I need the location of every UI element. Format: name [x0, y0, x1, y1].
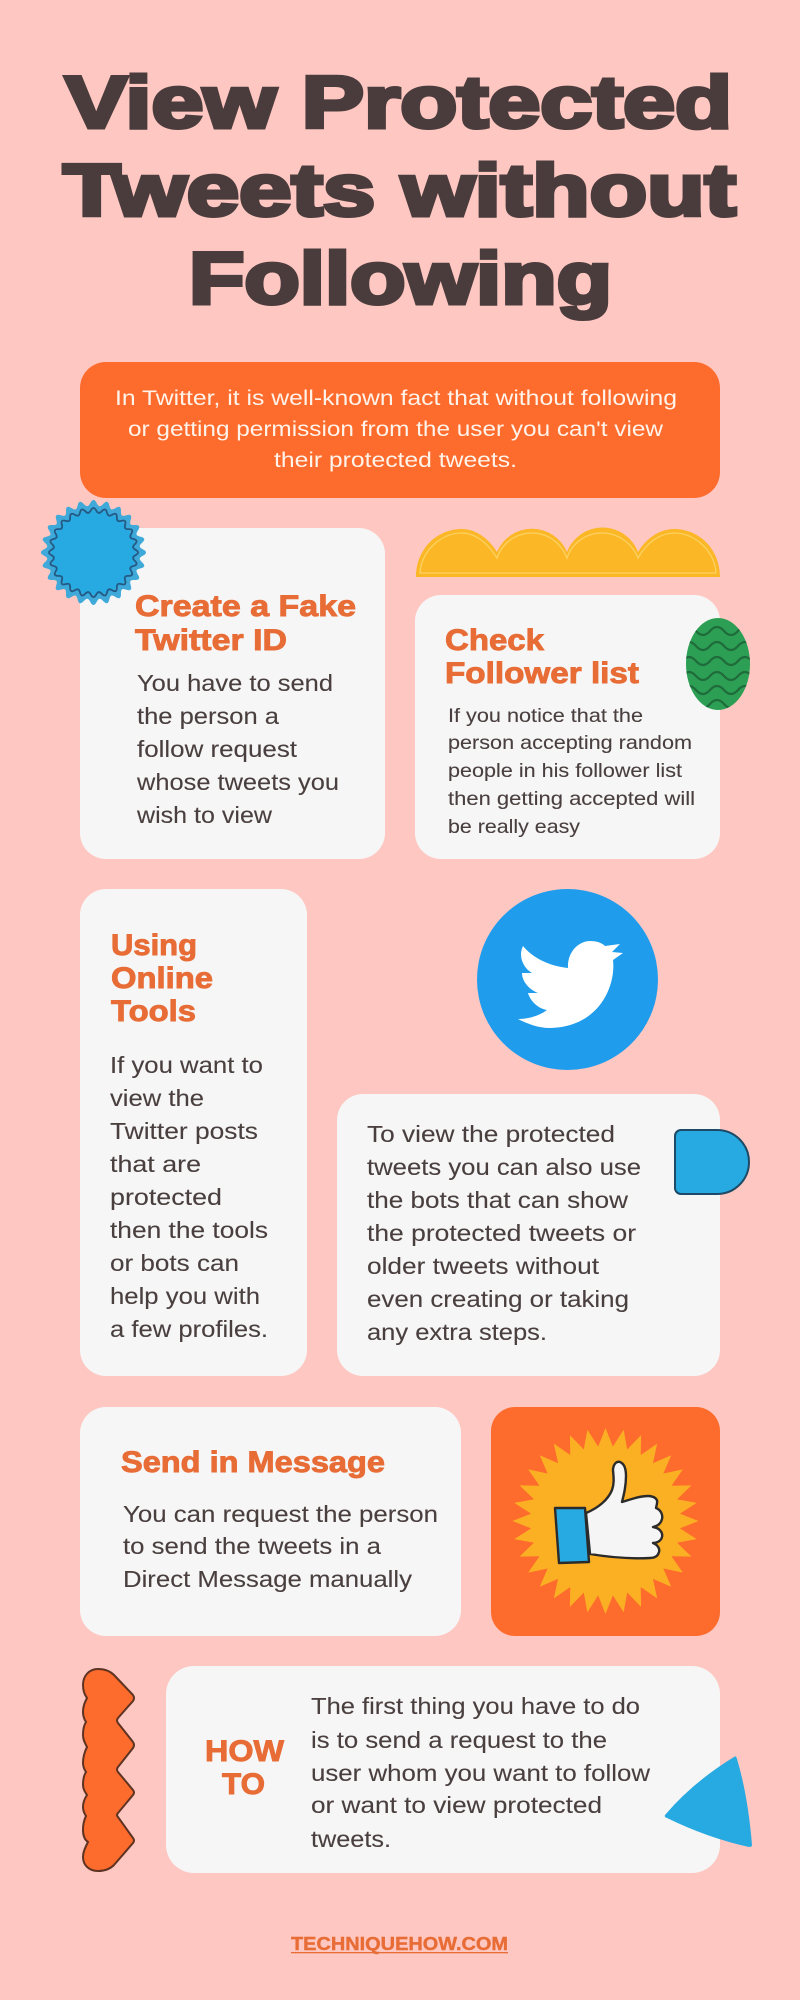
intro text: their protected tweets.: [274, 449, 517, 472]
body text: view the: [110, 1085, 204, 1111]
body text: Direct Message manually: [123, 1566, 413, 1592]
body text: If you notice that the: [448, 705, 643, 727]
body text: older tweets without: [367, 1253, 600, 1279]
panel: intro: [80, 362, 720, 498]
body text: whose tweets you: [136, 769, 339, 795]
body text: You have to send: [137, 670, 333, 696]
footer: website: TECHNIQUEHOW.COM: [291, 1934, 508, 1954]
heading: HOW: [205, 1735, 285, 1768]
panel: how to: [166, 1666, 720, 1873]
body text: people in his follower list: [448, 760, 683, 782]
heading: [135, 590, 356, 657]
body text: or want to view protected: [311, 1792, 602, 1818]
body text: [110, 1052, 268, 1342]
title: Following: [189, 238, 612, 320]
title: [63, 62, 736, 320]
body text: Twitter posts: [110, 1118, 258, 1144]
body text: the bots that can show: [367, 1187, 628, 1213]
body text: the protected tweets or: [367, 1220, 636, 1246]
body text: person accepting random: [448, 732, 692, 754]
body text: help you with: [110, 1283, 260, 1309]
body text: protected: [110, 1184, 222, 1210]
body text: is to send a request to the: [311, 1727, 607, 1753]
body text: to send the tweets in a: [123, 1533, 381, 1559]
body text: [311, 1693, 650, 1852]
panel: create a fake twitter id: [80, 528, 385, 859]
body text: any extra steps.: [367, 1319, 547, 1345]
intro text: [115, 387, 677, 472]
body text: or bots can: [110, 1250, 239, 1276]
body text: then the tools: [110, 1217, 268, 1243]
body text: wish to view: [136, 802, 272, 828]
icon: thumb hand: [586, 1462, 662, 1558]
heading: Online: [111, 962, 213, 995]
body text: [367, 1121, 641, 1345]
body text: You can request the person: [123, 1501, 438, 1527]
panel: send in message: [80, 1407, 461, 1636]
body text: To view the protected: [367, 1121, 615, 1147]
icon: blue D shape: [675, 1130, 749, 1194]
heading: Tools: [111, 995, 196, 1028]
body text: a few profiles.: [110, 1316, 268, 1342]
title: Tweets without: [63, 150, 736, 232]
body text: the person a: [137, 703, 279, 729]
heading: [445, 624, 639, 690]
body text: then getting accepted will: [448, 788, 695, 810]
heading: Using: [111, 929, 197, 962]
body text: [136, 670, 339, 828]
icon: yellow scallop: [416, 528, 720, 577]
icon: sunburst: [499, 1414, 712, 1628]
body text: If you want to: [110, 1052, 263, 1078]
heading: TO: [222, 1768, 265, 1801]
title: View Protected: [65, 62, 732, 144]
body text: even creating or taking: [367, 1286, 629, 1312]
panel: using online tools: [80, 889, 307, 1376]
body text: [448, 705, 695, 838]
intro text: or getting permission from the user you can't view: [128, 418, 664, 441]
body text: tweets.: [311, 1826, 391, 1852]
heading: Send in Message: [121, 1446, 385, 1479]
icon: orange wavy shape: [83, 1669, 134, 1871]
heading: Twitter ID: [135, 624, 287, 657]
body text: user whom you want to follow: [311, 1760, 650, 1786]
body text: [123, 1501, 438, 1592]
heading: Follower list: [445, 657, 639, 690]
body text: tweets you can also use: [367, 1154, 641, 1180]
body text: that are: [110, 1151, 201, 1177]
body text: be really easy: [448, 816, 580, 838]
intro text: In Twitter, it is well-known fact that without following: [115, 387, 677, 410]
panel: check follower list: [415, 595, 720, 859]
heading: Create a Fake: [135, 590, 356, 623]
panel: bots: [337, 1094, 720, 1376]
icon: blue triangle: [665, 1756, 752, 1847]
body text: The first thing you have to do: [311, 1693, 640, 1719]
panel: thumbs up: [491, 1407, 720, 1636]
icon: twitter logo: [477, 889, 658, 1070]
icon: green egg: [682, 618, 752, 710]
icon: blue badge: [41, 500, 146, 605]
icon: thumb sleeve: [555, 1508, 589, 1563]
heading: [205, 1735, 285, 1801]
heading: [111, 929, 213, 1028]
body text: follow request: [137, 736, 298, 762]
heading: Check: [445, 624, 544, 657]
